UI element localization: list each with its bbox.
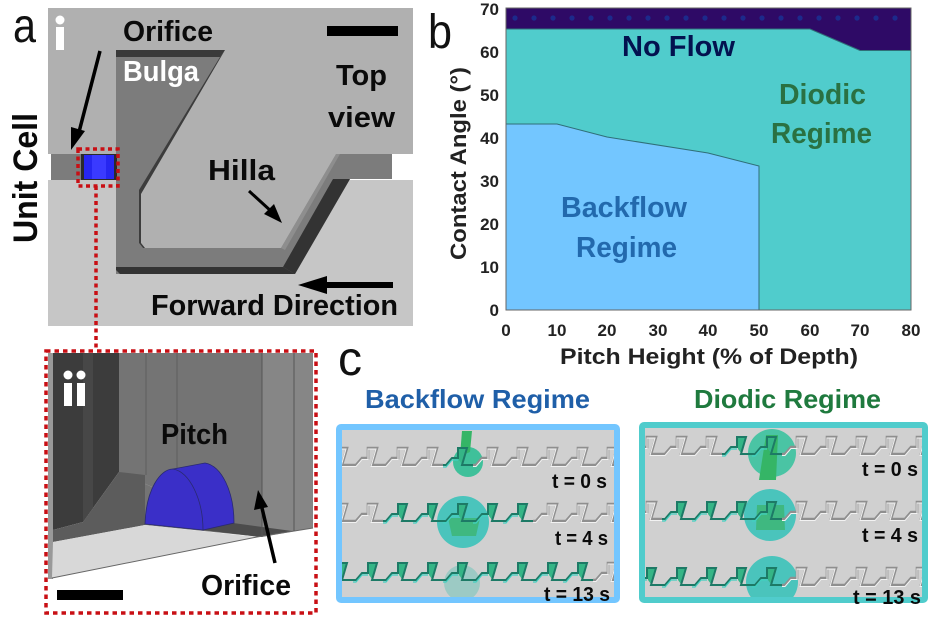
y axis title: Contact Angle (°) [446,67,471,260]
time labels [544,471,610,606]
y axis ticks: 60 [480,43,499,62]
y axis ticks: 50 [480,86,499,105]
diodic region [506,29,911,310]
zoom connector dotted red [94,186,98,350]
x axis ticks [501,321,920,340]
label Top view: view [328,102,395,134]
label Backflow Regime [561,192,687,264]
x axis ticks: 50 [750,321,768,340]
back wall [119,353,262,537]
time labels: t = 4 s [862,525,918,547]
y axis ticks: 10 [480,258,499,277]
panel: c backflow time series [323,427,623,606]
time labels: t = 13 s [544,584,610,606]
time labels: t = 13 s [853,587,921,609]
dotted red frame [46,351,316,613]
label Backflow Regime: Backflow [561,192,687,224]
dark side wall [53,353,119,530]
heading Diodic Regime: Diodic Regime [694,384,881,414]
channel floor [116,50,392,274]
label ii [64,370,86,406]
x axis ticks: 80 [902,321,920,340]
x axis ticks: 30 [649,321,667,340]
x axis ticks: 10 [548,321,566,340]
y axis ticks: 0 [490,301,499,320]
label Orifice: Orifice [201,570,291,602]
label Top view [328,60,395,134]
panel label c: c [338,333,362,386]
floor [53,472,145,542]
y axis ticks: 20 [480,215,499,234]
x axis title: Pitch Height (% of Depth) [560,344,858,369]
label i [56,16,64,50]
zoom box dotted red [78,149,118,186]
panel: b phase diagram [446,0,920,369]
y axis ticks: 40 [480,129,499,148]
label Orifice: Orifice [123,16,213,48]
channels row 3 [645,567,662,586]
label Unit Cell: Unit Cell [7,113,45,243]
label Backflow Regime: Regime [576,232,677,264]
x axis ticks: 60 [801,321,819,340]
label Diodic Regime [771,79,872,150]
time labels [853,459,921,609]
upper wall block and hilla island [48,8,413,248]
no flow region [506,8,911,51]
panel: a-ii pitch detail [46,351,316,613]
heading Backflow Regime: Backflow Regime [365,384,590,414]
y axis ticks: 70 [480,0,499,19]
label Pitch: Pitch [161,419,228,451]
label Forward Direction: Forward Direction [151,290,398,322]
scale bar [327,26,398,36]
label Hilla: Hilla [208,155,276,187]
label Diodic Regime: Regime [771,118,872,150]
label Top view: Top [336,60,387,92]
panel: a-i top view of unit cell [48,8,413,350]
lower wall block [48,180,413,326]
x axis ticks: 0 [501,321,511,340]
label No Flow: No Flow [622,31,735,63]
x axis ticks: 20 [598,321,616,340]
strip left of pitch [51,154,116,180]
channels row 2 [645,500,662,521]
y axis ticks: 30 [480,172,499,191]
channels row 3 [342,562,353,581]
time labels: t = 0 s [552,471,607,493]
arrow to orifice [254,490,275,563]
droplets [453,447,483,477]
label Bulga: Bulga [123,56,200,88]
label Diodic Regime: Diodic [779,79,866,111]
arrow to hilla [249,191,282,223]
scale bar [57,590,123,600]
channels row 1 [645,436,662,456]
y axis ticks [480,0,499,320]
time labels: t = 4 s [555,528,608,550]
time labels: t = 0 s [862,459,918,481]
x axis ticks: 70 [851,321,869,340]
panel: c diodic time series [632,425,932,609]
x axis ticks: 40 [699,321,717,340]
arrow to pitch [71,51,100,150]
arrow forward direction [298,276,393,294]
channels row 2 [342,502,353,523]
pitch in blue [81,154,117,180]
right wall [262,353,313,537]
pitch dome blue [145,463,234,530]
panel label b: b [428,6,452,59]
backflow region [506,124,759,310]
channels row 1 [342,446,353,467]
panel label a: a [13,0,36,53]
droplets [748,429,796,477]
